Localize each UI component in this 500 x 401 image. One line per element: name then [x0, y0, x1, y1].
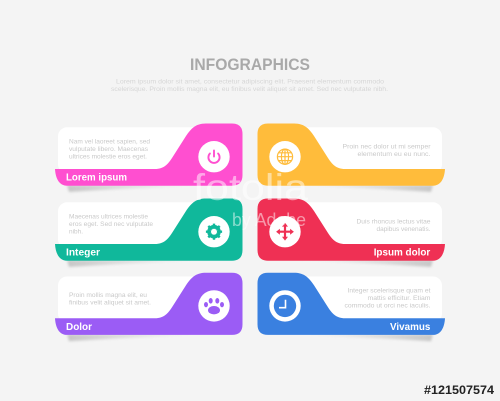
white card [292, 276, 442, 322]
panel: globe [258, 124, 445, 192]
white card [292, 127, 442, 173]
panel: Ipsum dolor [258, 198, 445, 267]
body text: Maecenas ultrices molestie [69, 214, 148, 220]
watermark [193, 167, 308, 230]
body text: eros eget. Sed nec vulputate [69, 221, 153, 228]
coloured shape [55, 124, 242, 186]
shadow [67, 334, 205, 341]
icon: paw [198, 290, 230, 322]
body text [356, 218, 431, 233]
title: INFOGRAPHICS [190, 55, 310, 74]
icon: globe [269, 141, 301, 172]
white card [58, 276, 208, 322]
shadow [295, 334, 433, 341]
shadow [295, 260, 433, 267]
body text: ultrices molestie eros eget. [69, 154, 147, 160]
body text: Nam vel laoreet sapien, sed [69, 138, 150, 146]
stock id: #121507574 [424, 383, 494, 397]
body text: Duis rhoncus lectus vitae [356, 218, 431, 225]
coloured shape [55, 273, 242, 335]
body text: Proin mollis magna elit, eu [69, 292, 147, 299]
icon: gear [198, 216, 230, 247]
white card [58, 127, 208, 173]
icon: clock [269, 290, 301, 322]
watermark: by Adobe [232, 210, 306, 230]
label: Ipsum dolor [374, 246, 430, 258]
body text: vulputate libero. Maecenas [69, 146, 149, 153]
shadow [67, 185, 205, 192]
body text: finibus velit aliquet sit amet. [69, 299, 151, 306]
body text: dapibus venenatis. [376, 226, 431, 233]
label: Dolor [66, 321, 92, 333]
body text: Integer scelerisque quam et [348, 288, 431, 295]
icon: move arrows [269, 216, 301, 247]
coloured shape [258, 124, 445, 186]
body text: mattis efficitur. Etiam [368, 295, 431, 302]
subtitle: Lorem ipsum dolor sit amet, consectetur adipiscing elit. Praesent elementum commodo [116, 78, 384, 86]
label: Vivamus [390, 321, 430, 333]
subtitle [111, 78, 388, 93]
body text: commodo ut orci nec iaculis. [344, 303, 431, 310]
label: Integer [66, 246, 100, 258]
body text [69, 138, 150, 160]
body text: Proin nec dolor ut mi semper [342, 143, 431, 150]
shadow [295, 185, 433, 192]
coloured shape [258, 198, 445, 261]
shadow [67, 260, 205, 267]
label: Lorem ipsum [66, 171, 127, 183]
body text [344, 288, 431, 310]
panel: Vivamus [258, 273, 445, 341]
icon: power [198, 141, 230, 172]
coloured shape [55, 198, 242, 261]
body text [69, 292, 151, 306]
subtitle: scelerisque. Proin mollis magna elit, eu finibus velit aliquet sit amet. Sed nec vulputate nibh. [111, 86, 388, 93]
body text: nibh. [69, 228, 83, 236]
body text: elementum eu eu nunc. [358, 151, 431, 158]
white card [292, 202, 442, 248]
body text [69, 214, 153, 236]
watermark: fotolia [193, 167, 308, 208]
panel: Dolor [55, 273, 242, 341]
coloured shape [258, 273, 445, 335]
panel: Integer [55, 198, 242, 267]
white card [58, 202, 208, 248]
body text [342, 143, 431, 158]
panel: Lorem ipsum [55, 124, 242, 192]
